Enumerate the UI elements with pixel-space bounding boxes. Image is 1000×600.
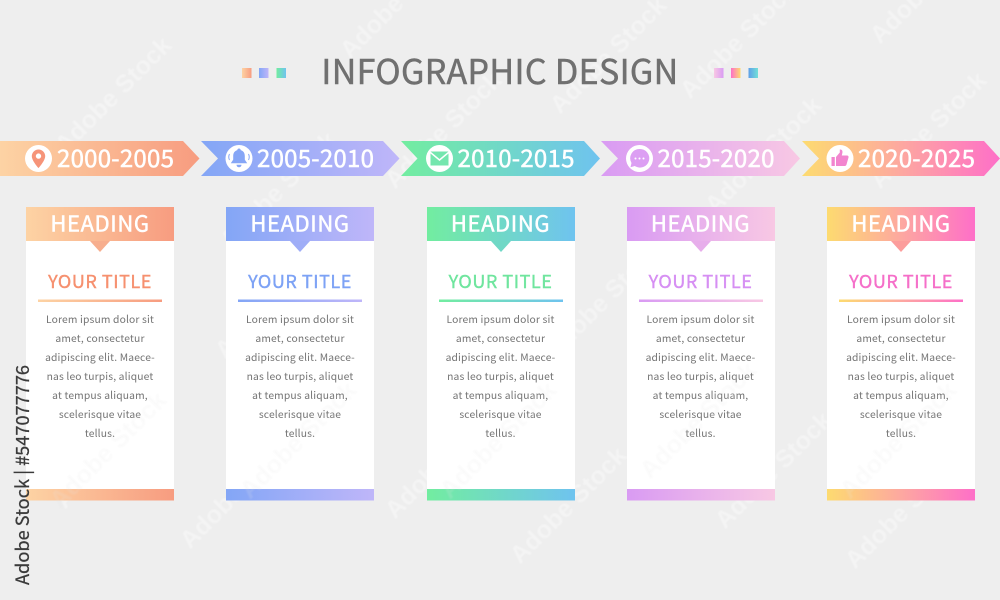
date label: 2000-2005 — [57, 139, 174, 174]
card title: YOUR TITLE — [47, 268, 152, 294]
watermark over cards: Adobe Stock — [634, 356, 762, 484]
watermark over cards — [44, 356, 962, 514]
body text: amet, consectetur — [55, 330, 145, 345]
watermark pattern: Adobe Stock — [539, 236, 667, 364]
date label: 2015-2020 — [658, 139, 775, 174]
body text: adipiscing elit. Maece- — [245, 349, 355, 364]
body text: at tempus aliquam, — [453, 387, 548, 402]
heading banner — [627, 206, 775, 252]
heading banner: HEADING — [851, 206, 951, 238]
body text: scelerisque vitae — [860, 406, 942, 421]
title underline — [839, 300, 963, 302]
body text: at tempus aliquam, — [52, 387, 148, 402]
date label: 2010-2015 — [458, 139, 575, 174]
title underline — [238, 300, 362, 302]
footer bar — [226, 489, 374, 500]
timeline arrow 2005-2010 — [201, 139, 400, 176]
body text — [646, 311, 756, 440]
title underline — [439, 300, 563, 302]
panel: card 5 — [827, 206, 975, 500]
body text: nas leo turpis, aliquet — [247, 368, 353, 383]
icon: thumbs up — [826, 145, 854, 172]
body text — [846, 311, 956, 440]
timeline arrow 2010-2015 — [401, 139, 600, 176]
body text: adipiscing elit. Maece- — [646, 349, 756, 364]
heading banner — [26, 206, 174, 252]
panel: card 1 — [26, 206, 174, 500]
body text: at tempus aliquam, — [252, 387, 348, 402]
body text: scelerisque vitae — [59, 406, 141, 421]
date label: 2005-2010 — [257, 139, 374, 174]
title underline — [639, 300, 763, 302]
heading banner: HEADING — [651, 206, 750, 238]
body text: at tempus aliquam, — [653, 387, 748, 402]
body text: scelerisque vitae — [459, 406, 542, 421]
body text: at tempus aliquam, — [853, 387, 949, 402]
card title: YOUR TITLE — [247, 268, 352, 294]
icon: envelope — [426, 145, 453, 172]
watermark pattern: Adobe Stock — [379, 396, 507, 524]
watermark over cards: Adobe Stock — [234, 376, 362, 504]
decorative squares: right of title — [714, 68, 758, 78]
watermark pattern: Adobe Stock — [49, 386, 177, 514]
heading banner — [226, 206, 374, 252]
watermark pattern: Adobe Stock — [49, 31, 177, 159]
panel: card 2 — [226, 206, 374, 500]
body text: tellus. — [485, 425, 516, 440]
body text: nas leo turpis, aliquet — [848, 368, 954, 383]
footer bar — [26, 489, 174, 500]
watermark pattern: Adobe Stock — [209, 236, 337, 364]
heading banner: HEADING — [451, 206, 550, 238]
body text: amet, consectetur — [456, 330, 546, 345]
footer bar — [627, 489, 775, 500]
watermark pattern: Adobe Stock — [214, 126, 342, 254]
panel: card 4 — [627, 206, 775, 500]
watermark pattern: Adobe Stock — [709, 406, 837, 534]
body text: Lorem ipsum dolor sit — [446, 311, 555, 326]
body text: scelerisque vitae — [659, 406, 742, 421]
footer bar — [827, 489, 975, 500]
watermark pattern: Adobe Stock — [699, 91, 827, 219]
decorative squares: left of title — [242, 68, 286, 78]
card title: YOUR TITLE — [648, 268, 752, 294]
body text: Lorem ipsum dolor sit — [246, 311, 354, 326]
body text: adipiscing elit. Maece- — [45, 349, 155, 364]
body text — [245, 311, 355, 440]
watermark over cards: Adobe Stock — [44, 386, 172, 514]
watermark pattern: Adobe Stock — [504, 441, 632, 569]
body text: tellus. — [886, 425, 916, 440]
body text: tellus. — [685, 425, 716, 440]
heading banner — [827, 206, 975, 252]
body text: Lorem ipsum dolor sit — [847, 311, 955, 326]
body text — [45, 311, 155, 440]
heading banner: HEADING — [50, 206, 150, 238]
body text: Lorem ipsum dolor sit — [46, 311, 154, 326]
timeline arrow 2020-2025 — [802, 139, 1000, 176]
body text: amet, consectetur — [656, 330, 746, 345]
body text: tellus. — [85, 425, 115, 440]
body text: adipiscing elit. Maece- — [846, 349, 956, 364]
timeline arrow 2015-2020 — [601, 139, 800, 176]
side credit text: Adobe Stock | #547077776 — [9, 365, 35, 585]
body text: adipiscing elit. Maece- — [446, 349, 556, 364]
icon: location pin — [25, 145, 52, 172]
body text: amet, consectetur — [856, 330, 946, 345]
body text: Lorem ipsum dolor sit — [646, 311, 755, 326]
footer bar — [427, 489, 575, 500]
icon: speech bubble — [626, 145, 653, 172]
watermark over cards: Adobe Stock — [834, 376, 962, 504]
body text: scelerisque vitae — [259, 406, 341, 421]
icon: bell — [226, 145, 252, 172]
card title: YOUR TITLE — [448, 268, 552, 294]
card title: YOUR TITLE — [848, 268, 953, 294]
body text: tellus. — [285, 425, 315, 440]
title: INFOGRAPHIC DESIGN — [321, 45, 679, 94]
body text: nas leo turpis, aliquet — [447, 368, 554, 383]
watermark pattern: Adobe Stock — [174, 426, 302, 554]
body text — [446, 311, 556, 440]
title underline — [38, 300, 162, 302]
date label: 2020-2025 — [858, 139, 975, 174]
timeline arrow 2000-2005 — [0, 139, 200, 176]
panel: card 3 — [427, 206, 575, 500]
watermark over cards: Adobe Stock — [434, 376, 562, 504]
body text: amet, consectetur — [255, 330, 345, 345]
heading banner — [427, 206, 575, 252]
watermark pattern: Adobe Stock — [864, 66, 992, 194]
body text: nas leo turpis, aliquet — [647, 368, 754, 383]
watermark pattern: Adobe Stock — [624, 236, 752, 364]
watermark pattern: Adobe Stock — [379, 66, 507, 194]
watermark pattern: Adobe Stock — [839, 446, 967, 574]
heading banner: HEADING — [250, 206, 350, 238]
body text: nas leo turpis, aliquet — [47, 368, 153, 383]
